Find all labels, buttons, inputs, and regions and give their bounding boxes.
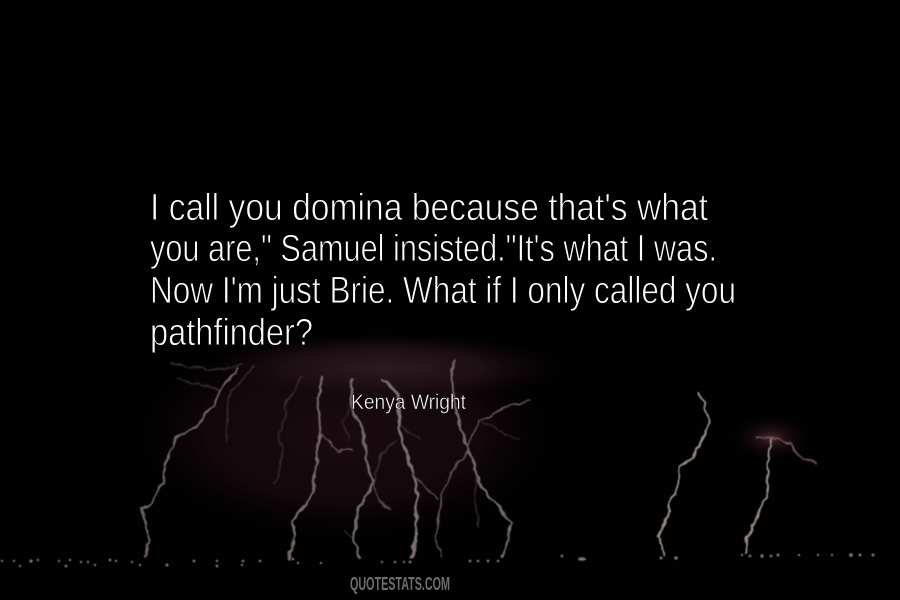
author name: Kenya Wright — [351, 391, 466, 414]
quote line 3: Now I'm just Brie. What if I only called you — [150, 270, 736, 312]
storm cloud glow — [130, 330, 813, 540]
lightning bolt 3 — [350, 380, 390, 558]
lightning bolt 1 — [142, 368, 238, 558]
lightning bolts — [142, 360, 817, 558]
lightning bolt 2 — [288, 377, 352, 558]
city lights — [1, 553, 875, 567]
lightning bolt 5 — [437, 360, 530, 557]
quote text — [150, 187, 736, 354]
quote line 1: I call you domina because that's what — [150, 187, 708, 229]
lightning bolt 6 — [657, 392, 710, 555]
lightning bolt 4 — [383, 380, 437, 558]
faint lightning branches — [170, 363, 520, 537]
lightning bolt 7 — [745, 437, 817, 553]
watermark: QUOTESTATS.COM — [350, 574, 450, 594]
quote line 2: you are," Samuel insisted."It's what I was. — [150, 228, 717, 270]
quote line 4: pathfinder? — [150, 312, 313, 354]
